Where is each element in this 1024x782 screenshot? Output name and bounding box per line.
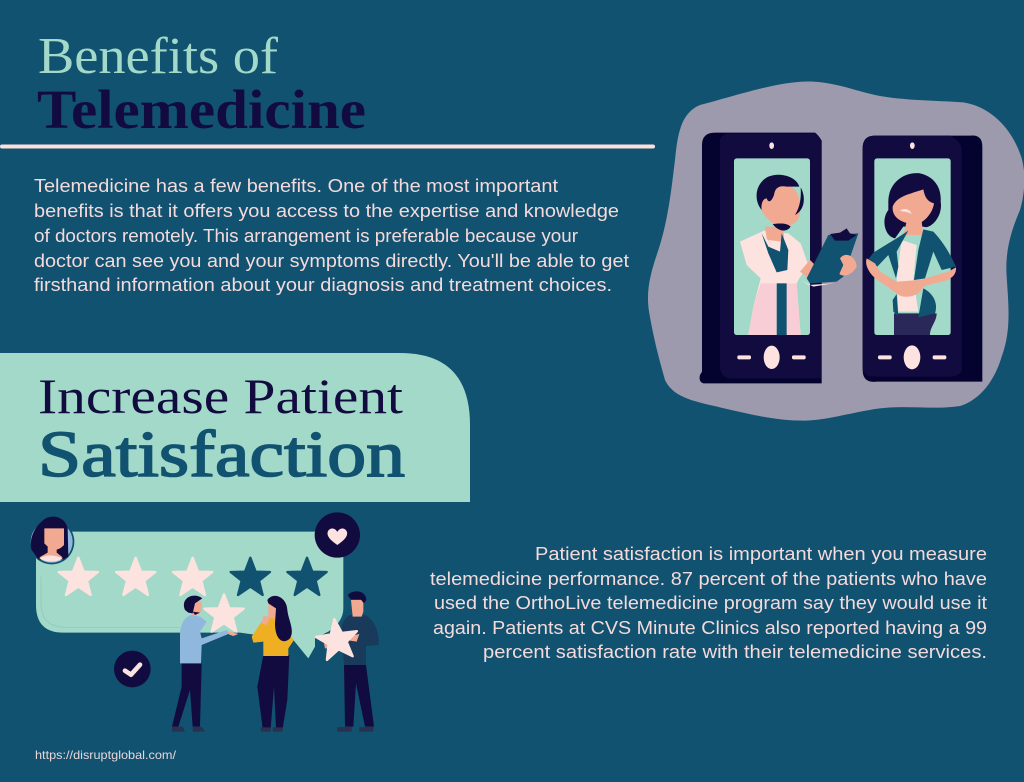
- text block: patient satisfaction: telemedicine performance. 87 percent of the patients who have: [430, 568, 987, 589]
- phone: doctor: [700, 133, 822, 383]
- rating stars: [59, 558, 327, 595]
- figure: patient: [866, 173, 956, 335]
- title: Benefits of Telemedicine: Telemedicine: [37, 79, 366, 140]
- illustration: doctor and patient on phones: [648, 82, 1024, 421]
- text block: telemedicine introduction: benefits is that it offers you access to the expertise and knowledge: [34, 200, 619, 221]
- panel: Increase Patient Satisfaction heading: Satisfaction: [38, 418, 405, 491]
- source url: https://disruptglobal.com/: [35, 748, 177, 762]
- text block: patient satisfaction: used the OrthoLive telemedicine program say they would use it: [434, 592, 987, 613]
- text block: telemedicine introduction: Telemedicine has a few benefits. One of the most important: [34, 175, 558, 196]
- panel: Increase Patient Satisfaction heading: Increase Patient: [38, 368, 403, 424]
- text block: telemedicine introduction: of doctors remotely. This arrangement is preferable because your: [34, 225, 578, 246]
- text block: telemedicine introduction: firsthand information about your diagnosis and treatment choices.: [34, 274, 612, 295]
- star held by man: [204, 594, 244, 632]
- title: Benefits of Telemedicine: [37, 28, 366, 140]
- phone: patient: [863, 135, 982, 382]
- person: man in blue sweater: [172, 596, 238, 732]
- blob background: [648, 82, 1024, 421]
- text block: patient satisfaction: again. Patients at CVS Minute Clinics also reported having a 99: [433, 617, 987, 638]
- avatar: woman: [29, 517, 74, 564]
- title: Benefits of Telemedicine: Benefits of: [38, 28, 279, 85]
- text block: telemedicine introduction: [34, 175, 629, 295]
- illustration: star rating with three people: [29, 512, 379, 732]
- text block: patient satisfaction: percent satisfaction rate with their telemedicine services.: [483, 641, 987, 662]
- panel: Increase Patient Satisfaction heading: [0, 353, 470, 502]
- rating speech bubble: [36, 532, 343, 658]
- star held by dark sweater man: [314, 616, 360, 661]
- person: man in dark sweater: [324, 591, 379, 732]
- text block: telemedicine introduction: doctor can see you and your symptoms directly. You'll be able to get: [34, 250, 629, 271]
- icon: check badge: [114, 651, 151, 687]
- figure: doctor: [740, 175, 858, 335]
- text block: patient satisfaction: Patient satisfaction is important when you measure: [535, 543, 987, 564]
- icon: heart badge: [315, 512, 360, 558]
- text block: patient satisfaction: [430, 543, 987, 662]
- person: woman in yellow sweater: [252, 596, 294, 732]
